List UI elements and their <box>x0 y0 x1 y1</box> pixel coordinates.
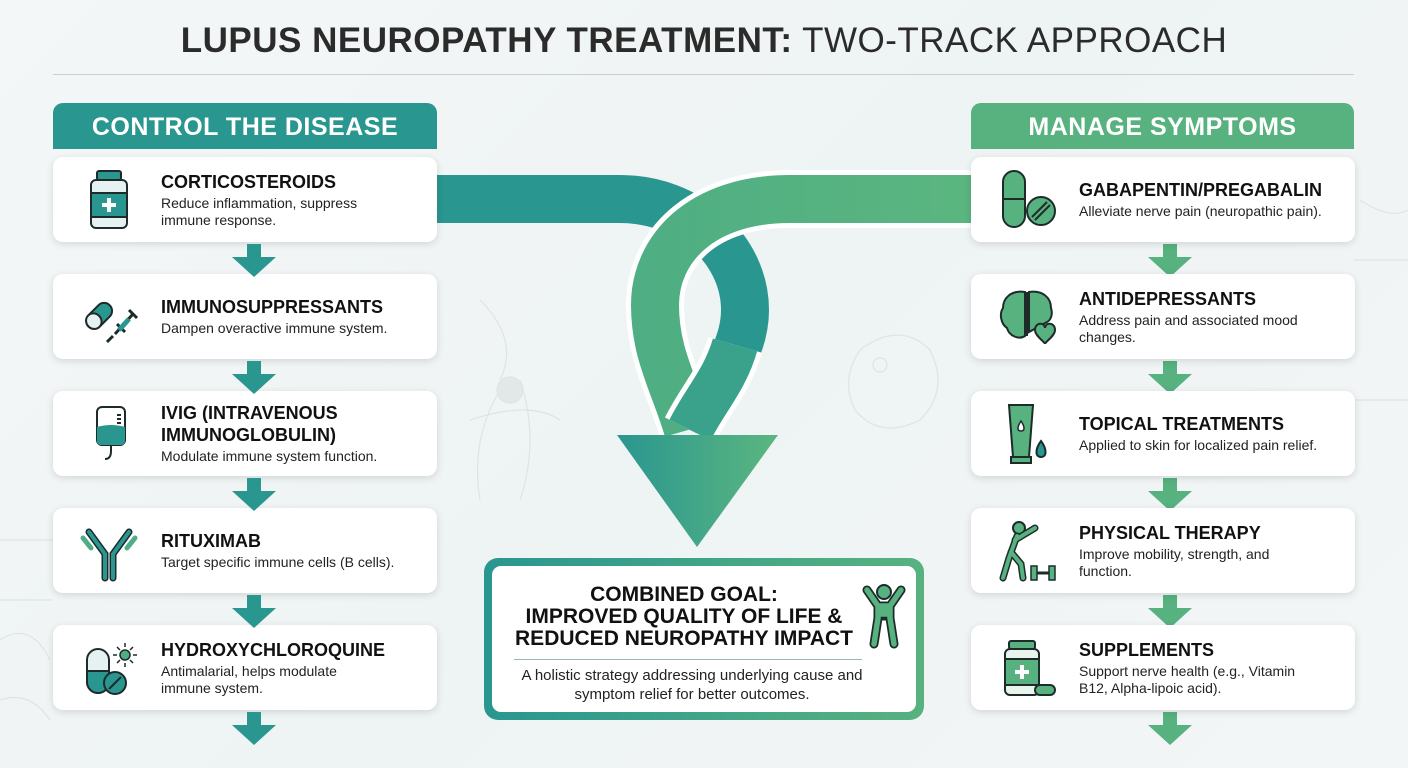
card: physical therapy: function. <box>1079 562 1132 578</box>
goal description: A holistic strategy addressing underlying cause and <box>521 667 863 684</box>
card: antidepressants: changes. <box>1079 328 1136 344</box>
card: antidepressants: ANTIDEPRESSANTS <box>1079 288 1256 308</box>
goal description: symptom relief for better outcomes. <box>574 686 810 703</box>
card: physical therapy: PHYSICAL THERAPY <box>1079 522 1261 542</box>
goal heading: REDUCED NEUROPATHY IMPACT <box>515 627 853 650</box>
card: immunosuppressants <box>53 274 437 359</box>
card: corticosteroids: Reduce inflammation, suppress <box>161 194 357 210</box>
card: corticosteroids <box>53 157 437 242</box>
card: gabapentin: Alleviate nerve pain (neuropathic pain). <box>1079 203 1322 219</box>
card: ivig: IVIG (INTRAVENOUS <box>161 403 338 423</box>
card: hydroxychloroquine: Antimalarial, helps modulate <box>161 662 337 678</box>
goal heading <box>515 583 853 650</box>
card: topical treatments <box>971 391 1355 476</box>
card: hydroxychloroquine <box>53 625 437 710</box>
card: gabapentin <box>971 157 1355 242</box>
card: rituximab <box>53 508 437 593</box>
heading: control the disease: CONTROL THE DISEASE <box>92 113 398 141</box>
card: antidepressants: Address pain and associated mood <box>1079 312 1298 328</box>
card: ivig <box>53 391 437 476</box>
card: corticosteroids: CORTICOSTEROIDS <box>161 172 336 192</box>
goal description <box>521 667 863 703</box>
card: topical treatments: Applied to skin for localized pain relief. <box>1079 437 1317 453</box>
card: supplements: Support nerve health (e.g., Vitamin <box>1079 662 1295 678</box>
goal heading: COMBINED GOAL: <box>590 583 778 606</box>
icon: person <box>862 584 906 648</box>
card: corticosteroids: immune response. <box>161 212 276 228</box>
card: supplements: B12, Alpha-lipoic acid). <box>1079 680 1221 696</box>
callout: combined goal <box>484 558 924 720</box>
card: ivig: Modulate immune system function. <box>161 448 377 464</box>
card: ivig: IMMUNOGLOBULIN) <box>161 425 336 445</box>
card: hydroxychloroquine: HYDROXYCHLOROQUINE <box>161 640 385 660</box>
goal heading: IMPROVED QUALITY OF LIFE & <box>526 605 842 628</box>
card: physical therapy: Improve mobility, strength, and <box>1079 546 1269 562</box>
card: physical therapy <box>971 508 1355 593</box>
card: immunosuppressants: IMMUNOSUPPRESSANTS <box>161 297 383 317</box>
card: immunosuppressants: Dampen overactive immune system. <box>161 320 387 336</box>
card: hydroxychloroquine: immune system. <box>161 680 263 696</box>
card: antidepressants <box>971 274 1355 359</box>
card: supplements <box>971 625 1355 710</box>
card: rituximab: Target specific immune cells (B cells). <box>161 554 394 570</box>
card: rituximab: RITUXIMAB <box>161 531 261 551</box>
heading: control the disease <box>53 103 437 149</box>
card: topical treatments: TOPICAL TREATMENTS <box>1079 414 1284 434</box>
card: gabapentin: GABAPENTIN/PREGABALIN <box>1079 180 1322 200</box>
heading: manage symptoms <box>971 103 1354 149</box>
card: supplements: SUPPLEMENTS <box>1079 640 1214 660</box>
heading: manage symptoms: MANAGE SYMPTOMS <box>1028 113 1297 141</box>
title: LUPUS NEUROPATHY TREATMENT: TWO-TRACK APPROACH <box>181 21 1227 60</box>
